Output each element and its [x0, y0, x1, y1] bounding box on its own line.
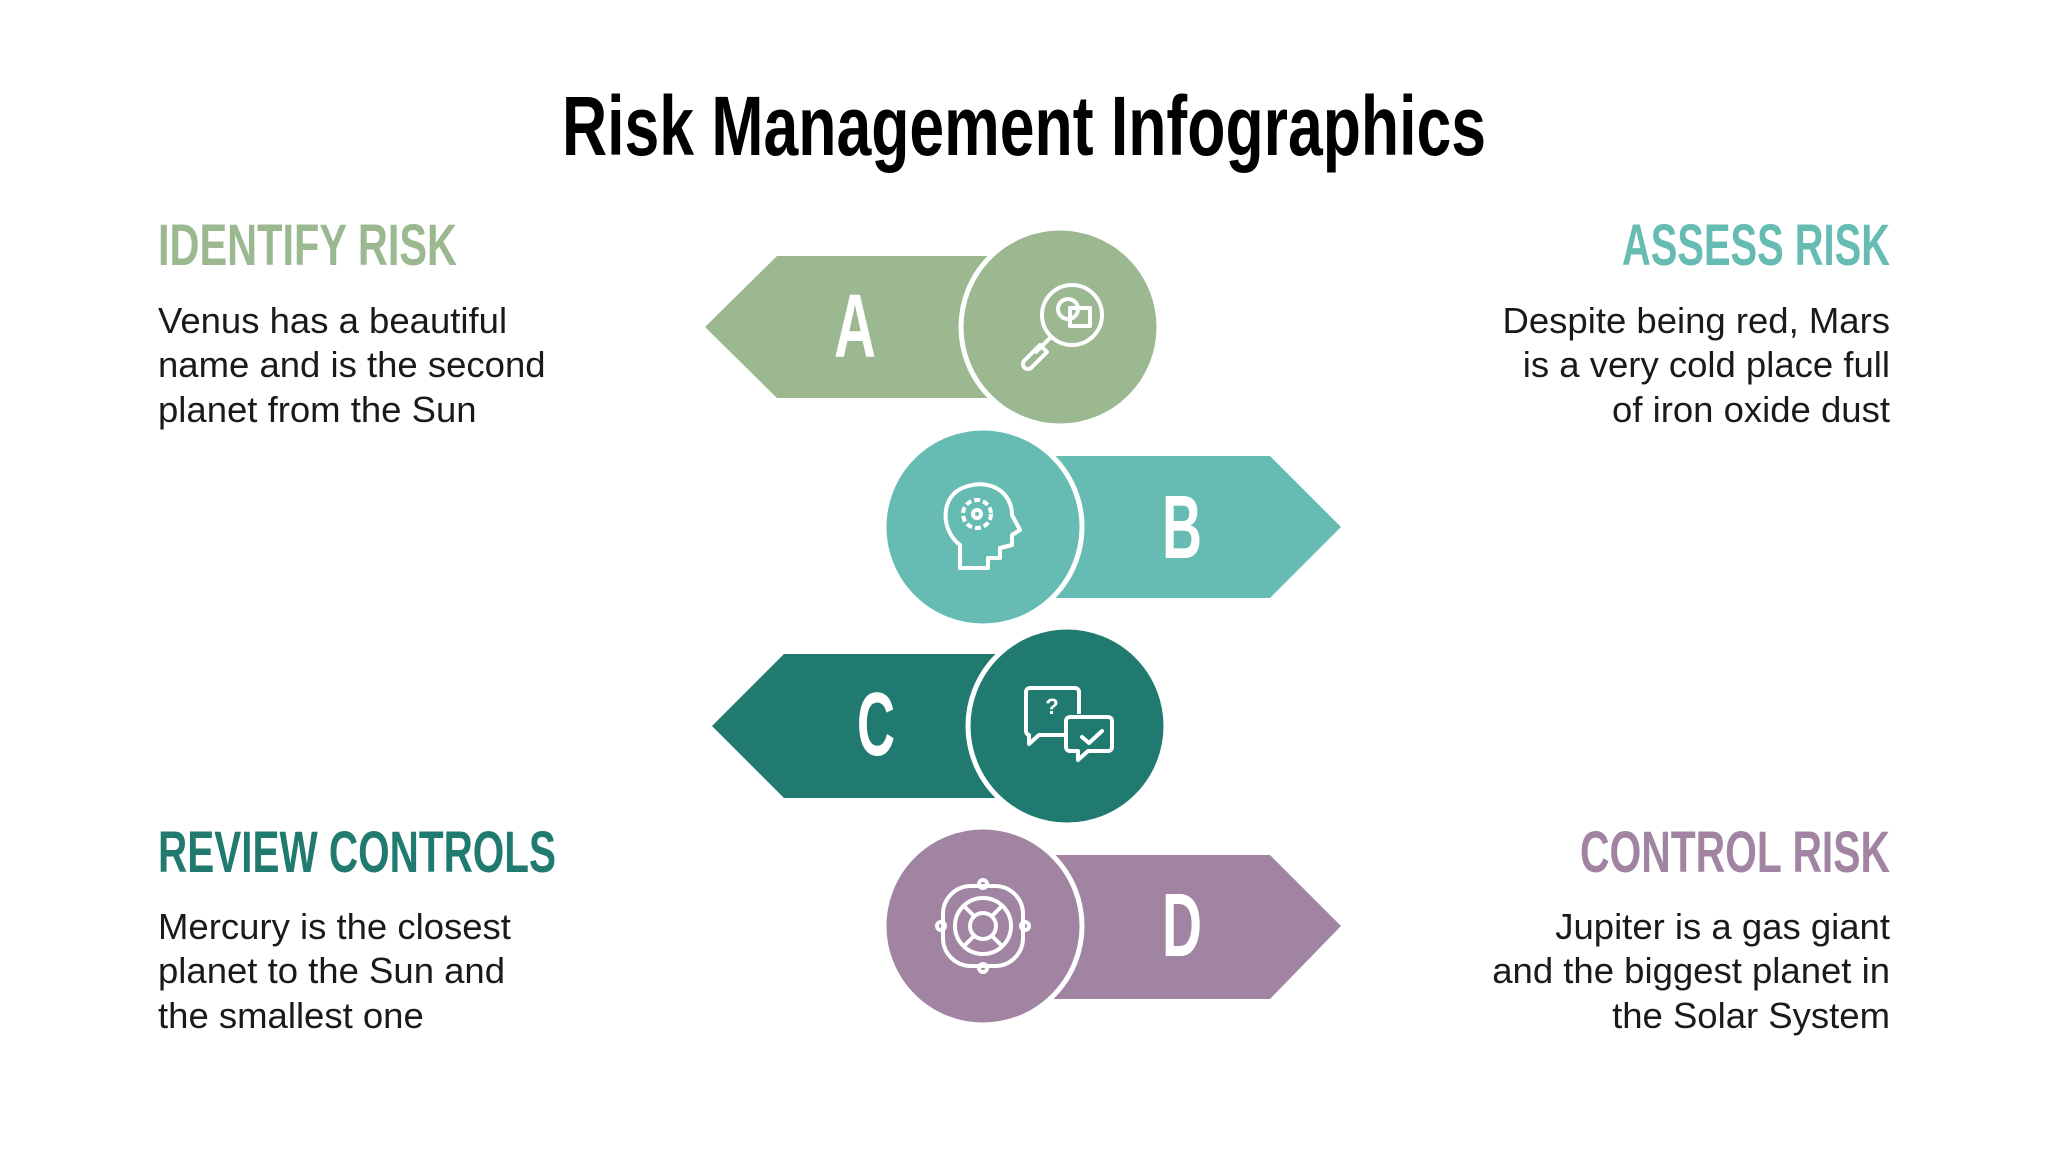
arrow D: [1030, 855, 1341, 999]
step A: [705, 228, 1159, 426]
letter A: A: [834, 277, 876, 377]
panel: control risk: [1492, 820, 1890, 1036]
arrow C: [712, 654, 1010, 798]
text block: review controls: the smallest one: [158, 995, 424, 1036]
text block: control risk: Jupiter is a gas giant: [1555, 906, 1890, 947]
circle B: [884, 428, 1082, 626]
letter C: C: [857, 675, 895, 775]
text block: assess risk: of iron oxide dust: [1612, 389, 1890, 430]
text block: review controls: Mercury is the closest: [158, 906, 511, 947]
panel: review controls: [158, 820, 556, 1036]
panel: assess risk: [1502, 213, 1890, 430]
heading: assess risk: ASSESS RISK: [1622, 213, 1890, 278]
text block: identify risk: Venus has a beautiful: [158, 300, 507, 341]
text block: identify risk: planet from the Sun: [158, 389, 477, 430]
step B: [884, 428, 1341, 626]
icon: chat bubbles: [1026, 688, 1112, 760]
circle A: [961, 228, 1159, 426]
panel: identify risk: [158, 213, 546, 430]
circle D: [884, 827, 1082, 1025]
icon: head with gear: [946, 484, 1020, 568]
icon: magnifier: [1023, 285, 1102, 369]
icon: chat bubbles: ?: [1045, 694, 1059, 719]
heading: review controls: REVIEW CONTROLS: [158, 820, 556, 885]
letter D: D: [1162, 876, 1202, 976]
text block: assess risk: Despite being red, Mars: [1502, 300, 1890, 341]
heading: identify risk: IDENTIFY RISK: [158, 213, 457, 278]
text block: review controls: planet to the Sun and: [158, 950, 505, 991]
arrow B: [1030, 456, 1341, 598]
icon: lifebuoy: [937, 880, 1029, 972]
step D: [884, 827, 1341, 1025]
arrow A: [705, 256, 1010, 398]
heading: control risk: CONTROL RISK: [1580, 820, 1890, 885]
letter B: B: [1162, 478, 1202, 578]
text block: control risk: the Solar System: [1612, 995, 1890, 1036]
text block: control risk: and the biggest planet in: [1492, 950, 1890, 991]
step C: [712, 627, 1166, 825]
text block: identify risk: name and is the second: [158, 344, 546, 385]
text block: assess risk: is a very cold place full: [1523, 344, 1890, 385]
circle C: [968, 627, 1166, 825]
title: Risk Management Infographics: [562, 79, 1486, 173]
